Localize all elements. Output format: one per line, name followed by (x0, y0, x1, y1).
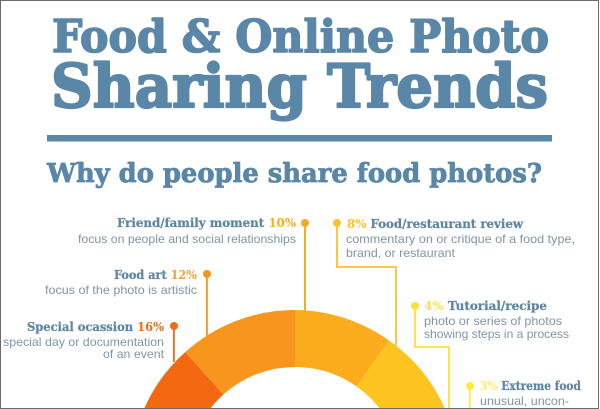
connector: special occasion (170, 322, 178, 362)
title (51, 10, 549, 122)
label: friend/family moment: Friend/family moment 10% (117, 216, 297, 230)
label: food/restaurant review (346, 217, 575, 260)
label: food art (45, 268, 198, 297)
label: tutorial/recipe: showing steps in a process (424, 327, 569, 341)
label: food art: focus of the photo is artistic (45, 283, 197, 297)
subheading: Why do people share food photos? (46, 158, 542, 189)
connector: friend/family moment (301, 219, 309, 311)
label: tutorial/recipe (424, 299, 569, 341)
donut chart (144, 310, 445, 409)
label: food/restaurant review: brand, or restaurant (346, 246, 456, 260)
title: Food & Online Photo (52, 10, 549, 63)
label: extreme food (480, 379, 582, 408)
label: special occasion (3, 320, 165, 361)
label: friend/family moment (78, 216, 297, 246)
connector: food/restaurant review (333, 219, 396, 346)
label: friend/family moment: focus on people and social relationships (78, 232, 296, 246)
label: special occasion: of an event (103, 347, 165, 361)
connector: food art (203, 270, 211, 336)
title: Sharing Trends (51, 52, 548, 122)
label: extreme food: unusual, uncon- (480, 394, 569, 408)
label: food/restaurant review: 8% Food/restaurant review (347, 217, 524, 231)
label: extreme food: 3% Extreme food (480, 379, 582, 393)
label: tutorial/recipe: photo or series of photos (424, 314, 562, 328)
connector: extreme food (466, 382, 474, 409)
label: special occasion: special day or documentation (3, 335, 164, 349)
label: tutorial/recipe: 4% Tutorial/recipe (424, 299, 547, 313)
label: special occasion: Special ocassion 16% (27, 320, 165, 334)
title divider rule (47, 135, 552, 142)
label: food art: Food art 12% (114, 268, 198, 282)
label: food/restaurant review: commentary on or critique of a food type, (346, 232, 575, 246)
connector: tutorial/recipe (411, 302, 449, 409)
